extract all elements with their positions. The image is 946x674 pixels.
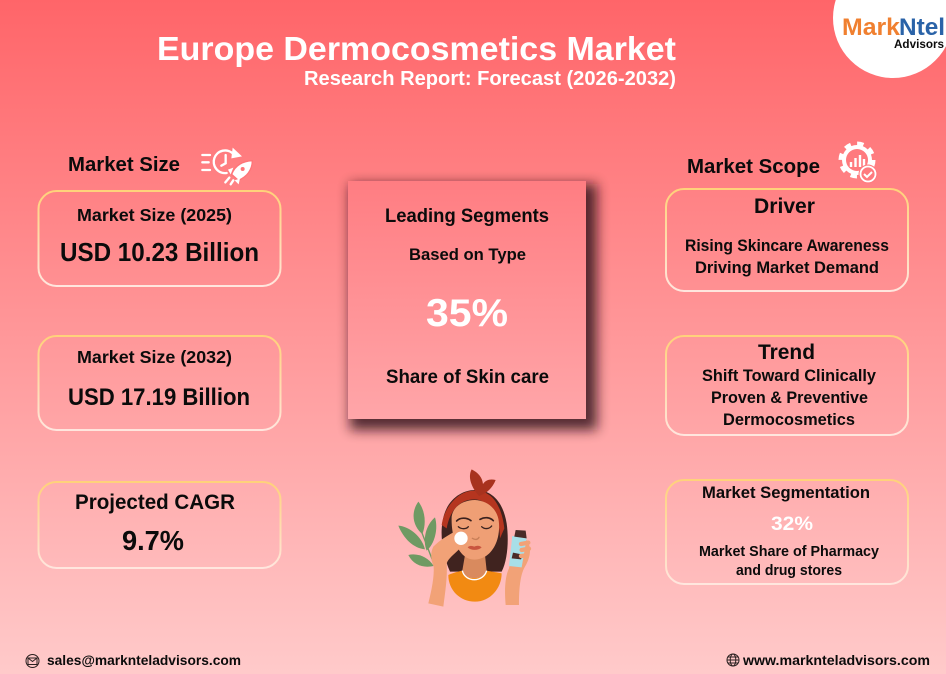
logo: Mark — [842, 14, 901, 41]
card: market size 2025 — [38, 191, 280, 286]
card: market size 2025: USD 10.23 Billion — [60, 237, 259, 267]
panel: leading segments: Based on Type — [409, 245, 526, 264]
card: market segmentation: Market Segmentation — [702, 483, 870, 502]
card: driver: Driving Market Demand — [695, 259, 879, 277]
card: trend: Proven & Preventive — [711, 389, 868, 407]
panel: leading segments: Share of Skin care — [386, 366, 549, 388]
heading: market scope: Market Scope — [687, 156, 820, 178]
card: projected CAGR: Projected CAGR — [75, 491, 235, 514]
card: market segmentation: and drug stores — [736, 563, 842, 579]
card: market segmentation: Market Share of Pharmacy — [699, 544, 879, 560]
cotton pad — [454, 532, 468, 545]
icon: gear with chart and check — [840, 144, 878, 184]
card: projected CAGR: 9.7% — [122, 525, 184, 556]
card: driver: Rising Skincare Awareness — [685, 237, 889, 255]
card: market size 2032: Market Size (2032) — [77, 347, 232, 367]
face — [452, 500, 499, 560]
panel: leading segments: 35% — [426, 292, 508, 335]
eyes, nose, mouth — [457, 518, 493, 550]
card: market segmentation: 32% — [771, 514, 813, 535]
card: trend: Shift Toward Clinically — [702, 367, 877, 385]
card: driver — [666, 189, 908, 291]
footer: website: www.marknteladvisors.com — [742, 653, 930, 668]
hair — [442, 490, 508, 572]
heading: market size: Market Size — [68, 154, 180, 176]
left arm and hand — [428, 531, 463, 607]
card: market size 2025: Market Size (2025) — [77, 205, 232, 225]
logo: Ntel — [899, 14, 945, 41]
neck — [462, 555, 487, 578]
subtitle: Research Report: Forecast (2026-2032) — [304, 68, 676, 90]
card: trend: Trend — [758, 341, 815, 364]
headband — [442, 469, 504, 538]
logo: Advisors — [894, 37, 944, 51]
title: Europe Dermocosmetics Market — [157, 30, 676, 67]
panel: leading segments: Leading Segments — [385, 205, 549, 227]
panel: leading segments — [348, 181, 597, 430]
card: market size 2032: USD 17.19 Billion — [68, 384, 250, 411]
card: projected CAGR — [38, 482, 280, 568]
illustration: woman applying skincare — [398, 469, 530, 607]
leaves — [398, 502, 436, 567]
logo — [833, 0, 946, 78]
top — [448, 571, 502, 602]
card: market segmentation — [666, 480, 908, 584]
card: trend — [666, 336, 908, 435]
bottle — [509, 536, 527, 567]
icon: clock and rocket — [202, 148, 252, 184]
card: driver: Driver — [754, 195, 815, 218]
right arm and hand — [505, 540, 530, 605]
card: market size 2032 — [38, 336, 280, 430]
footer: email: sales@marknteladvisors.com — [47, 653, 241, 668]
card: trend: Dermocosmetics — [723, 411, 855, 429]
fingers — [521, 543, 529, 556]
necklace — [462, 571, 487, 580]
